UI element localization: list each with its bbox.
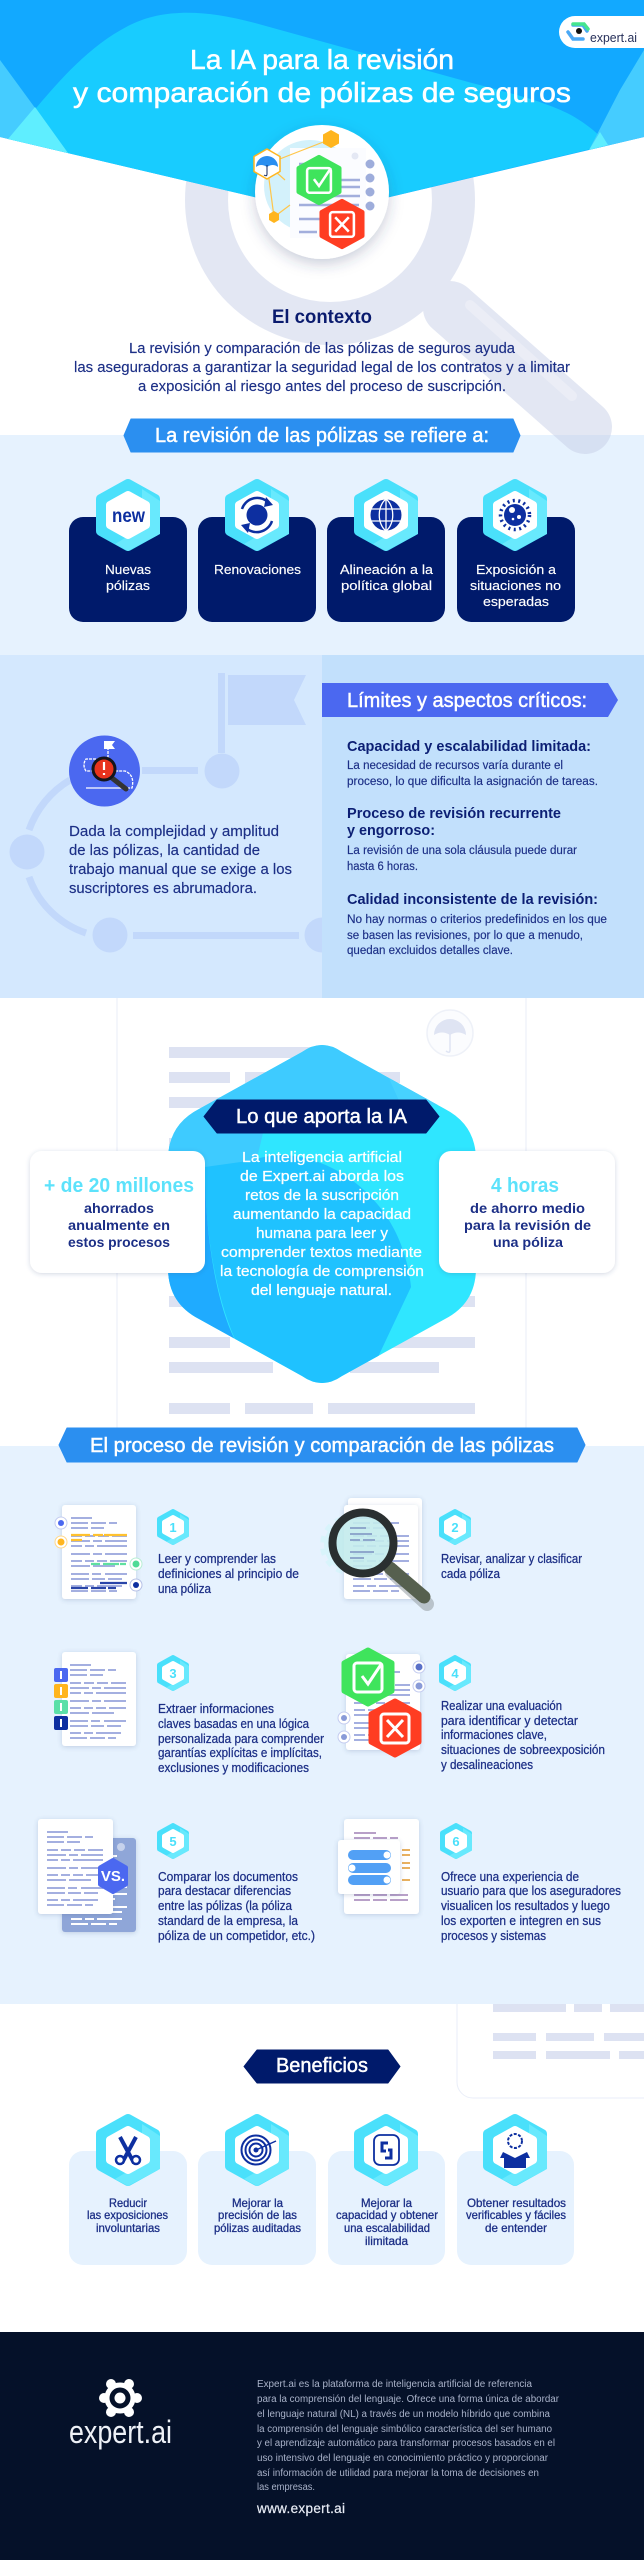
ribbon: benefits heading: Beneficios bbox=[276, 2055, 368, 2077]
step 1 bbox=[55, 1505, 299, 1599]
logo: expert.ai badge: expert.ai bbox=[590, 30, 637, 45]
card: nuevas pólizas: Nuevas bbox=[105, 562, 152, 577]
step 2 bbox=[324, 1498, 582, 1604]
text block: recurring process: Proceso de revisión recurrente bbox=[347, 805, 561, 822]
benefit: reduce exposure bbox=[69, 2119, 187, 2265]
text block: context: a exposición al riesgo antes del proceso de suscripción. bbox=[138, 379, 506, 395]
text block: inconsistent quality: quedan excluidos detalles clave. bbox=[347, 945, 513, 957]
badge: number 4 bbox=[442, 1658, 471, 1691]
benefit: verifiable results bbox=[457, 2119, 574, 2265]
badge: number 5 bbox=[160, 1826, 189, 1859]
logo: expert.ai white bbox=[69, 2379, 172, 2450]
step 3 bbox=[54, 1652, 324, 1775]
text: step 6: Ofrece una experiencia de bbox=[441, 1870, 579, 1884]
text: step 1: definiciones al principio de bbox=[158, 1567, 299, 1581]
benefit: reduce exposure: involuntarias bbox=[96, 2221, 160, 2235]
card: alineación bbox=[327, 484, 445, 622]
card: renovaciones bbox=[198, 484, 316, 622]
illustration: two documents versus: VS. bbox=[101, 1868, 125, 1885]
text: step 5: para destacar diferencias bbox=[158, 1884, 291, 1898]
text block: AI description: humana para leer y bbox=[256, 1226, 389, 1242]
watermark: magnifying glass bbox=[206, 76, 585, 427]
text block: about expert.ai bbox=[257, 2379, 560, 2493]
text block: limited capacity bbox=[347, 738, 598, 788]
card: exposición bbox=[457, 484, 575, 622]
panel: complexity (left) bbox=[0, 655, 322, 998]
text: step 4 bbox=[441, 1699, 605, 1772]
stat card: 20 million saved: + de 20 millones bbox=[44, 1175, 194, 1197]
text: step 4: y desalineaciones bbox=[441, 1758, 533, 1772]
ribbon: policy review heading bbox=[124, 419, 520, 452]
text: step 3: claves basadas en una lógica bbox=[158, 1717, 309, 1731]
badge: number 2: 2 bbox=[451, 1520, 459, 1535]
text block: limited capacity: Capacidad y escalabilidad limitada: bbox=[347, 738, 591, 755]
text block: workload: de las pólizas, la cantidad de bbox=[69, 843, 260, 859]
text: step 1: una póliza bbox=[158, 1582, 211, 1596]
text block: limited capacity: proceso, lo que dificulta la asignación de tareas. bbox=[347, 776, 598, 788]
ribbon: limits heading: Límites y aspectos críticos: bbox=[347, 690, 587, 712]
illustration: magnifier over document bbox=[324, 1498, 427, 1604]
stat card: 4 hours saved bbox=[439, 1151, 615, 1273]
text block: AI description bbox=[220, 1150, 424, 1299]
illustration: dashboard sliders bbox=[338, 1819, 419, 1914]
ribbon: process heading: El proceso de revisión y comparación de las pólizas bbox=[90, 1435, 554, 1457]
benefit: improve precision: Mejorar la bbox=[232, 2196, 283, 2210]
ribbon: benefits heading bbox=[244, 2050, 400, 2083]
text block: inconsistent quality: No hay normas o criterios predefinidos en los que bbox=[347, 914, 607, 926]
benefit: reduce exposure: las exposiciones bbox=[87, 2208, 168, 2222]
card: nuevas pólizas: new bbox=[112, 506, 145, 527]
text: step 3: Extraer informaciones bbox=[158, 1702, 274, 1716]
benefit: improve capacity: ilimitada bbox=[365, 2234, 408, 2248]
panel: big hexagon bbox=[168, 1045, 476, 1383]
text: step 3: personalizada para comprender bbox=[158, 1732, 324, 1746]
text block: AI description: La inteligencia artificial bbox=[242, 1150, 402, 1166]
step 4 bbox=[338, 1650, 605, 1772]
heading: context: El contexto bbox=[272, 307, 372, 328]
decoration: route with flag bbox=[10, 673, 340, 952]
stat card: 20 million saved bbox=[30, 1151, 205, 1273]
benefit: improve capacity: Mejorar la bbox=[361, 2196, 412, 2210]
text: step 4: Realizar una evaluación bbox=[441, 1699, 562, 1713]
text block: workload: suscriptores es abrumadora. bbox=[69, 881, 257, 897]
text: step 3: exclusiones y modificaciones bbox=[158, 1761, 309, 1775]
stat card: 4 hours saved: una póliza bbox=[493, 1234, 563, 1250]
text: step 4: informaciones clave, bbox=[441, 1728, 547, 1742]
benefit: verifiable results: verificables y fáciles bbox=[466, 2208, 566, 2222]
card: nuevas pólizas: pólizas bbox=[106, 578, 151, 593]
illustration: pass and fail document bbox=[338, 1650, 425, 1755]
text block: limited capacity: La necesidad de recursos varía durante el bbox=[347, 760, 563, 772]
text: step 2: cada póliza bbox=[441, 1567, 500, 1581]
stat card: 20 million saved: ahorrados bbox=[84, 1200, 154, 1216]
benefit: improve precision: pólizas auditadas bbox=[214, 2221, 301, 2235]
watermark: document corner bbox=[456, 2004, 644, 2098]
text block: workload: Dada la complejidad y amplitud bbox=[69, 824, 279, 840]
text block: context bbox=[74, 341, 570, 395]
text block: about expert.ai: uso intensivo del lenguaje en conocimiento práctico y proporcionar bbox=[257, 2453, 549, 2464]
text block: inconsistent quality bbox=[347, 891, 607, 957]
text block: about expert.ai: así información de utilidad para mejorar la toma de decisiones en bbox=[257, 2468, 539, 2479]
text block: inconsistent quality: se basen las revisiones, por lo que a menudo, bbox=[347, 930, 583, 942]
illustration: tagged document bbox=[54, 1652, 136, 1746]
text block: about expert.ai: la comprensión del lenguaje simbólico característica del ser humano bbox=[257, 2424, 552, 2435]
logo: expert.ai white: expert.ai bbox=[69, 2414, 172, 2450]
link: website: www.expert.ai bbox=[256, 2501, 345, 2516]
text block: recurring process: y engorroso: bbox=[347, 822, 435, 839]
badge: number 3: 3 bbox=[169, 1666, 177, 1681]
panel: limits (right) bbox=[322, 655, 644, 998]
footer panel bbox=[0, 2332, 644, 2560]
text: step 5: standard de la empresa, la bbox=[158, 1914, 298, 1928]
card: exposición: situaciones no bbox=[470, 578, 561, 593]
text: step 1 bbox=[158, 1552, 299, 1596]
badge: number 6: 6 bbox=[452, 1834, 460, 1849]
benefit: improve capacity: una escalabilidad bbox=[344, 2221, 430, 2235]
hero illustration: document check bbox=[254, 125, 389, 259]
badge: number 2 bbox=[442, 1512, 471, 1545]
text: step 3 bbox=[158, 1702, 324, 1775]
card: alineación: Alineación a la bbox=[340, 562, 434, 577]
card: exposición: Exposición a bbox=[476, 562, 557, 577]
text: step 2: Revisar, analizar y clasificar bbox=[441, 1552, 582, 1566]
step 6 bbox=[338, 1819, 621, 1943]
text: step 6: procesos y sistemas bbox=[441, 1929, 546, 1943]
ribbon: policy review heading: La revisión de las pólizas se refiere a: bbox=[155, 425, 489, 447]
text: step 4: para identificar y detectar bbox=[441, 1714, 578, 1728]
text block: context: las aseguradoras a garantizar la seguridad legal de los contratos y a limitar bbox=[74, 360, 570, 376]
band: process section background bbox=[0, 1446, 644, 2004]
stat card: 20 million saved: estos procesos bbox=[68, 1234, 170, 1250]
band: policy review section background bbox=[0, 435, 644, 655]
title bbox=[73, 44, 571, 108]
card: alineación: política global bbox=[341, 578, 432, 593]
text block: about expert.ai: Expert.ai es la plataforma de inteligencia artificial de referencia bbox=[257, 2379, 532, 2390]
step 5 bbox=[38, 1819, 315, 1943]
text block: AI description: de Expert.ai aborda los bbox=[240, 1169, 404, 1185]
title: y comparación de pólizas de seguros bbox=[73, 77, 571, 108]
benefit: improve capacity: capacidad y obtener bbox=[336, 2208, 438, 2222]
text: step 5: entre las pólizas (la póliza bbox=[158, 1899, 292, 1913]
stat card: 20 million saved: anualmente en bbox=[68, 1217, 170, 1233]
stat card: 4 hours saved: de ahorro medio bbox=[470, 1200, 585, 1216]
text block: context: La revisión y comparación de las pólizas de seguros ayuda bbox=[129, 341, 516, 357]
ribbon: limits heading bbox=[322, 683, 618, 717]
watermark: policy document bbox=[117, 998, 526, 1436]
card: renovaciones: Renovaciones bbox=[214, 562, 302, 577]
badge: number 3 bbox=[160, 1658, 189, 1691]
text block: recurring process bbox=[347, 805, 577, 873]
text: step 5 bbox=[158, 1870, 315, 1943]
text block: AI description: aumentando la capacidad bbox=[233, 1207, 411, 1223]
benefit: reduce exposure: Reducir bbox=[109, 2196, 147, 2210]
ribbon: what AI brings bbox=[204, 1100, 439, 1133]
badge: number 5: 5 bbox=[169, 1834, 177, 1849]
text: step 6: los exporten e integren en sus bbox=[441, 1914, 601, 1928]
badge: number 4: 4 bbox=[451, 1666, 459, 1681]
benefit: improve precision: precisión de las bbox=[218, 2208, 297, 2222]
text block: recurring process: hasta 6 horas. bbox=[347, 861, 418, 873]
text: step 1: Leer y comprender las bbox=[158, 1552, 276, 1566]
title: La IA para la revisión bbox=[190, 44, 454, 75]
benefit: improve precision bbox=[198, 2119, 316, 2265]
ribbon: process heading bbox=[59, 1428, 585, 1462]
badge: number 1: 1 bbox=[169, 1520, 177, 1535]
text: step 5: póliza de un competidor, etc.) bbox=[158, 1929, 315, 1943]
text: step 6: visualicen los resultados y luego bbox=[441, 1899, 610, 1913]
text block: inconsistent quality: Calidad inconsistente de la revisión: bbox=[347, 891, 598, 908]
stat card: 4 hours saved: 4 horas bbox=[491, 1175, 559, 1197]
badge: number 6 bbox=[442, 1826, 472, 1859]
text: step 5: Comparar los documentos bbox=[158, 1870, 298, 1884]
card: exposición: esperadas bbox=[483, 594, 550, 609]
text: step 4: situaciones de sobreexposición bbox=[441, 1743, 605, 1757]
text: step 6: usuario para que los aseguradores bbox=[441, 1884, 621, 1898]
text block: about expert.ai: el lenguaje natural (NL) a través de un modelo híbrido que combina bbox=[257, 2409, 550, 2420]
text block: about expert.ai: y el aprendizaje automático para transformar procesos basados en el bbox=[257, 2438, 555, 2449]
ribbon: what AI brings: Lo que aporta la IA bbox=[236, 1106, 408, 1128]
icon: route with magnifier alert bbox=[69, 736, 140, 806]
logo: expert.ai badge bbox=[559, 16, 644, 48]
badge: number 1 bbox=[160, 1512, 189, 1545]
illustration: two documents versus bbox=[38, 1819, 136, 1932]
text: step 6 bbox=[441, 1870, 621, 1943]
stat card: 4 hours saved: para la revisión de bbox=[464, 1217, 591, 1233]
text block: about expert.ai: las empresas. bbox=[257, 2482, 315, 2493]
text block: AI description: comprender textos mediante bbox=[221, 1245, 422, 1261]
text: step 2 bbox=[441, 1552, 582, 1581]
benefit: verifiable results: Obtener resultados bbox=[467, 2196, 566, 2210]
text block: workload bbox=[69, 824, 292, 897]
text block: recurring process: La revisión de una sola cláusula puede durar bbox=[347, 845, 577, 857]
text block: workload: trabajo manual que se exige a los bbox=[69, 862, 292, 878]
text: step 3: garantías explícitas e implícitas, bbox=[158, 1746, 322, 1760]
illustration: highlighted document bbox=[55, 1505, 142, 1599]
benefit: improve capacity bbox=[328, 2119, 445, 2265]
text block: AI description: retos de la suscripción bbox=[245, 1188, 399, 1204]
benefit: verifiable results: de entender bbox=[485, 2221, 547, 2235]
text block: AI description: la tecnología de comprensión bbox=[220, 1264, 424, 1280]
text block: AI description: del lenguaje natural. bbox=[251, 1283, 392, 1299]
card: nuevas pólizas bbox=[69, 484, 187, 622]
hero header background bbox=[0, 0, 644, 213]
text block: about expert.ai: para la comprensión del lenguaje. Ofrece una forma única de abordar bbox=[257, 2394, 560, 2405]
